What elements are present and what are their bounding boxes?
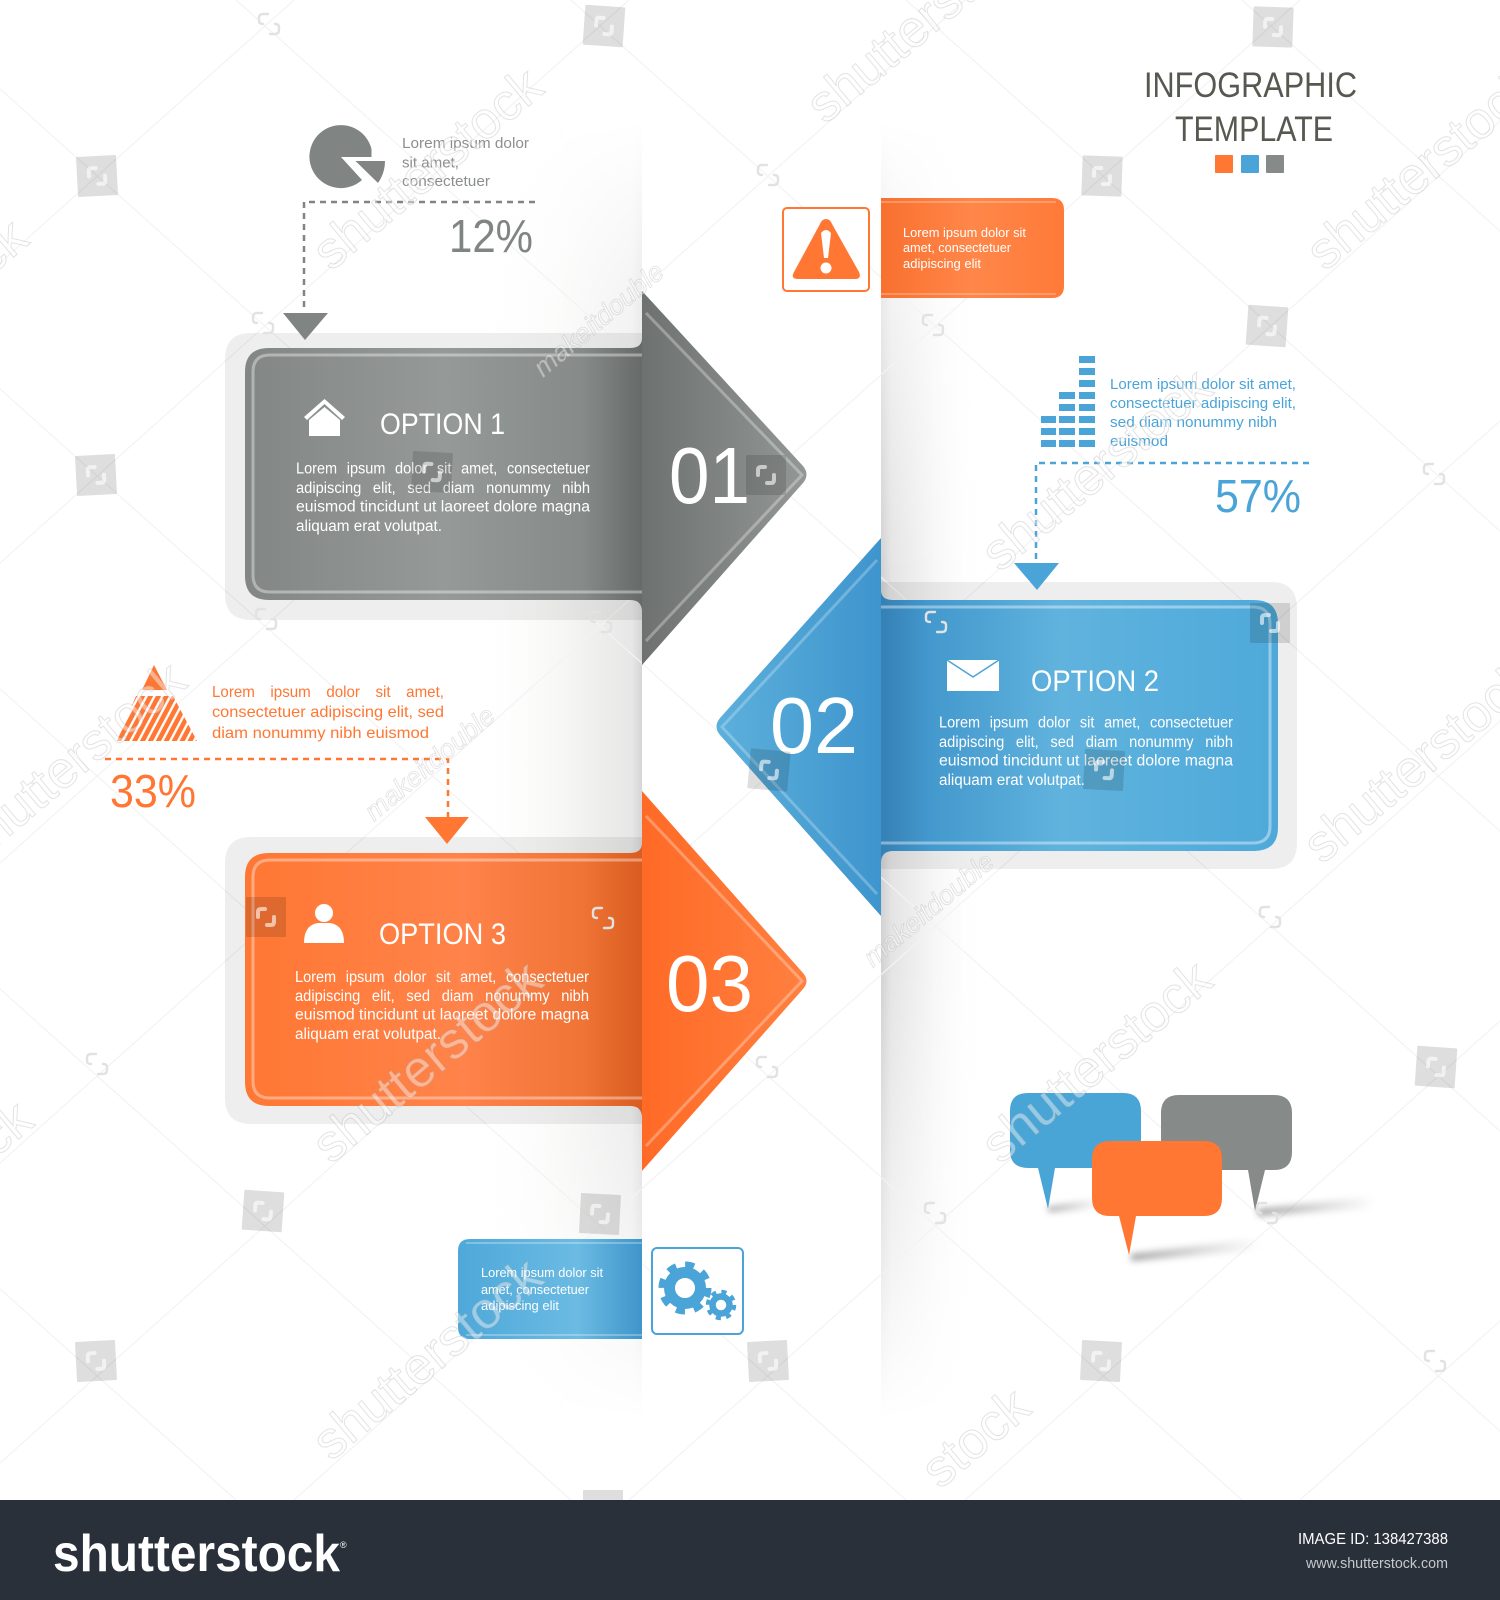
number 01: 01 <box>669 431 750 520</box>
watermark author text <box>359 256 1000 973</box>
option 1 body text: adipiscing elit, sed diam nonummy nibh <box>296 480 590 497</box>
option 3 bar <box>245 843 642 1118</box>
blue card text: Lorem ipsum dolor sit <box>481 1265 603 1280</box>
logo registered mark: ® <box>340 1540 347 1550</box>
arrow 01 inner outline <box>646 313 802 641</box>
orange card <box>881 198 1064 298</box>
website url: www.shutterstock.com <box>1305 1555 1448 1572</box>
option 3 body text: adipiscing elit, sed diam nonummy nibh <box>295 988 589 1005</box>
watermark text: stock <box>910 1376 1041 1499</box>
option 2 bar <box>881 590 1278 863</box>
option 1 body text: aliquam erat volutpat. <box>296 518 442 535</box>
option 3 body text: Lorem ipsum dolor sit amet, consectetuer <box>295 969 589 986</box>
12% text block: Lorem ipsum dolor <box>402 135 529 152</box>
image id: IMAGE ID: 138427388 <box>1298 1531 1448 1548</box>
option 1 inner outline <box>253 355 642 592</box>
12% value: 12% <box>449 210 533 262</box>
dashed connector <box>105 759 448 817</box>
arrow 03 inner outline <box>646 816 802 1146</box>
callout: 12% <box>283 125 535 340</box>
orange card text: Lorem ipsum dolor sit <box>903 225 1026 240</box>
watermark text: shutterstock <box>301 1246 554 1471</box>
blue card text: adipiscing elit <box>481 1298 559 1313</box>
option 1 body text <box>296 460 590 535</box>
57% text block: euismod <box>1110 433 1168 450</box>
arrow head <box>1014 563 1059 590</box>
icon: gears <box>652 1248 743 1334</box>
option 1 body text: Lorem ipsum dolor sit amet, consectetuer <box>296 460 590 478</box>
57% text block <box>1110 376 1296 450</box>
number 02: 02 <box>770 681 858 770</box>
57% value: 57% <box>1215 470 1301 522</box>
arrow 02 <box>716 538 881 916</box>
icon: warning box <box>783 208 869 291</box>
watermark text: shutterstock <box>970 949 1223 1174</box>
card highlight <box>881 202 1056 294</box>
callout: warning card <box>783 198 1064 298</box>
watermark author text: makeitdouble <box>858 846 1000 973</box>
option 3 inner outline <box>253 860 642 1098</box>
number 03: 03 <box>666 939 753 1028</box>
arrow head <box>283 313 328 340</box>
callout: blue card with gears <box>458 1239 743 1339</box>
option 3 body text <box>295 969 589 1043</box>
dashed connector <box>304 202 535 312</box>
footer banner <box>0 1500 1500 1600</box>
arrow 01 <box>642 291 806 665</box>
33% text block <box>212 684 444 742</box>
footer logo: shutterstock <box>53 1525 340 1583</box>
panel: option 2 <box>716 538 1297 916</box>
title <box>1144 65 1357 149</box>
orange bubble <box>1092 1141 1222 1255</box>
icon: pyramid <box>117 665 197 741</box>
33% value: 33% <box>110 765 196 817</box>
12% text block: consectetuer <box>402 173 490 190</box>
watermark author text: makeitdouble <box>528 256 670 383</box>
panel: option 3 <box>225 791 806 1171</box>
icon: pie chart <box>309 125 385 188</box>
watermark text: shutterstock <box>301 56 554 281</box>
option 1 heading: OPTION 1 <box>380 408 505 441</box>
33% text block: Lorem ipsum dolor sit amet, <box>212 684 444 701</box>
blue card text <box>481 1265 603 1313</box>
icon: house <box>304 399 345 436</box>
icon: person <box>304 904 344 943</box>
arrow head <box>425 817 469 844</box>
option 2 body text: adipiscing elit, sed diam nonummy nibh <box>939 734 1233 751</box>
57% text block: Lorem ipsum dolor sit amet, <box>1110 376 1296 393</box>
arrow 02 inner outline <box>722 560 877 894</box>
57% text block: sed diam nonummy nibh <box>1110 414 1277 431</box>
dashed connector <box>1036 463 1309 563</box>
title: INFOGRAPHIC <box>1144 65 1357 105</box>
panel: option 1 <box>225 291 806 665</box>
speech bubbles <box>1010 1093 1375 1261</box>
icon: envelope <box>947 660 999 691</box>
57% text block: consectetuer adipiscing elit, <box>1110 395 1296 412</box>
callout: 57% <box>1014 356 1309 590</box>
option 1 bar <box>245 338 642 612</box>
33% text block: diam nonummy nibh euismod <box>212 725 429 742</box>
blue bubble <box>1010 1093 1141 1209</box>
watermark text: shutterstock <box>970 357 1223 582</box>
watermark author text: makeitdouble <box>359 700 501 827</box>
callout: 33% <box>105 665 469 844</box>
orange card text: adipiscing elit <box>903 256 981 271</box>
arrow 03 <box>642 791 806 1171</box>
33% text block: consectetuer adipiscing elit, sed <box>212 704 444 721</box>
blue card <box>458 1239 642 1339</box>
12% text block: sit amet, <box>402 154 459 172</box>
option 2 body text <box>939 714 1233 789</box>
option 2 body text: Lorem ipsum dolor sit amet, consectetuer <box>939 714 1233 732</box>
option 3 body text: euismod tincidunt ut laoreet dolore magna <box>295 1006 589 1024</box>
12% text block <box>402 135 529 190</box>
orange card text: amet, consectetuer <box>903 240 1012 255</box>
option 2 inner outline <box>881 607 1270 843</box>
option 2 body text: euismod tincidunt ut laoreet dolore magna <box>939 752 1233 770</box>
orange card text <box>903 225 1026 271</box>
background shading beside central band <box>555 192 936 1354</box>
bubble shadows <box>1048 1196 1375 1261</box>
option 2 heading: OPTION 2 <box>1031 665 1159 698</box>
card highlight <box>466 1243 642 1335</box>
legend colour squares <box>1215 155 1284 173</box>
option 2 body text: aliquam erat volutpat. <box>939 772 1085 789</box>
title: TEMPLATE <box>1175 109 1333 149</box>
icon: bar chart <box>1041 356 1095 447</box>
grey bubble <box>1161 1095 1292 1211</box>
watermark text: shutterstock <box>301 949 554 1174</box>
option 1 body text: euismod tincidunt ut laoreet dolore magna <box>296 498 590 516</box>
option 3 heading: OPTION 3 <box>379 918 506 951</box>
blue card text: amet, consectetuer <box>481 1282 590 1297</box>
option 3 body text: aliquam erat volutpat. <box>295 1026 441 1043</box>
